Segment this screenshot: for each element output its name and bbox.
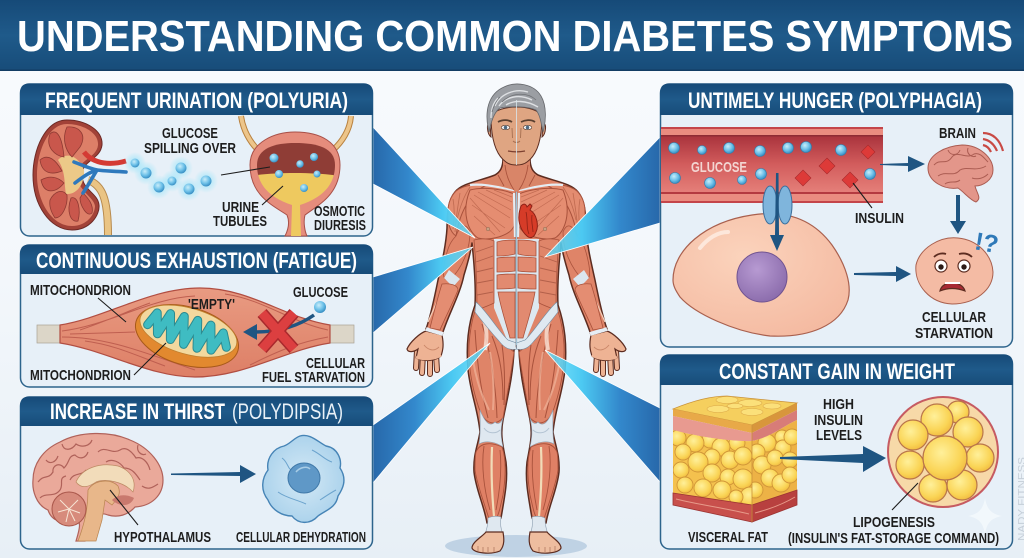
labels: CELLULAR DEHYDRATION (236, 529, 366, 546)
biceps (443, 226, 470, 280)
labels: 'EMPTY' (188, 296, 235, 313)
icon: sparkle (968, 498, 1002, 534)
beam: polyphagia (545, 137, 660, 257)
arrow (854, 266, 911, 282)
header banner (0, 0, 1024, 71)
leader line (221, 167, 283, 205)
leader line (98, 298, 166, 375)
heading: CONSTANT GAIN IN WEIGHT (719, 359, 955, 384)
obliques (474, 239, 494, 310)
icon: signal waves (983, 133, 1003, 152)
labels: MITOCHONDRION (30, 282, 131, 299)
heading: INCREASE IN THIRST (50, 399, 225, 424)
icon: cell with nucleus (673, 214, 849, 336)
labels: VISCERAL FAT (688, 529, 768, 546)
beam: polydipsia (373, 343, 490, 483)
labels: MITOCHONDRION (30, 367, 131, 384)
labels (855, 125, 993, 342)
foot (472, 532, 504, 553)
arrow (780, 446, 886, 472)
labels: OSMOTIC (314, 203, 365, 220)
hand (407, 331, 443, 374)
deltoid (448, 185, 485, 236)
floor shadow (445, 535, 587, 557)
labels: FUEL STARVATION (262, 369, 365, 386)
pectoral (466, 188, 514, 239)
heading: CONTINUOUS EXHAUSTION (FATIGUE) (36, 248, 357, 273)
heading: FREQUENT URINATION (POLYURIA) (45, 88, 348, 113)
icon: kidney (33, 120, 126, 235)
icon: mitochondrion (128, 294, 246, 378)
facial features (498, 100, 535, 165)
knee (479, 410, 503, 447)
leader line (110, 490, 138, 525)
labels (30, 282, 365, 386)
icon: channel and arrow (763, 173, 792, 251)
blood vessel (661, 127, 883, 203)
arrow (950, 195, 966, 234)
labels: HIGH (823, 396, 854, 413)
labels: GLUCOSE (293, 284, 348, 301)
forearm (430, 284, 458, 330)
heading: (POLYDIPSIA) (232, 399, 343, 424)
labels: STARVATION (915, 325, 993, 342)
icon: dehydrated cell (263, 435, 344, 522)
icon: bladder (241, 116, 351, 236)
icon: adipocyte cluster (888, 397, 998, 507)
face (491, 107, 542, 165)
labels: CELLULAR (922, 309, 986, 326)
labels: BRAIN (939, 125, 976, 142)
labels: LIPOGENESIS (853, 514, 935, 531)
icon: starving cell face (916, 238, 993, 304)
beam: weight gain (545, 350, 660, 482)
labels: LEVELS (816, 427, 862, 444)
linea alba (516, 158, 518, 345)
labels: INSULIN (855, 210, 904, 227)
panel: continuous exhaustion (20, 244, 373, 387)
panel: increase in thirst (20, 396, 373, 549)
arrow (171, 465, 256, 483)
icon: brain (928, 145, 993, 202)
blood vessel: GLUCOSE (691, 159, 747, 176)
labels (688, 396, 999, 547)
labels (144, 125, 366, 234)
arrow (880, 156, 925, 172)
labels: DIURESIS (314, 217, 366, 234)
labels: INSULIN (814, 412, 863, 429)
neck (484, 150, 549, 192)
beam: polyuria (373, 127, 475, 238)
labels: URINE (222, 199, 259, 216)
panel: constant gain in weight (660, 354, 1013, 549)
heart (519, 204, 537, 238)
icon: muscle fibre (37, 288, 354, 377)
glucose molecules (668, 142, 876, 188)
beam: fatigue (373, 247, 473, 333)
leader line (892, 483, 918, 510)
hair (487, 84, 545, 132)
icon: spilled glucose drops (124, 152, 218, 201)
abs fascia (494, 239, 516, 345)
panel: frequent urination (20, 84, 373, 236)
thigh (469, 311, 514, 423)
clavicle and central fascia (470, 185, 515, 237)
abs (497, 240, 515, 338)
labels: CELLULAR (306, 355, 365, 372)
icon: blocked glucose arrow (243, 301, 326, 349)
elbow fascia (444, 270, 460, 287)
icon: exclamation mark and question mark: !? (973, 227, 1001, 259)
labels: SPILLING OVER (144, 140, 236, 157)
pelvic fascia (475, 302, 516, 349)
labels: TUBULES (213, 213, 267, 230)
leader line (853, 183, 872, 208)
ankle (485, 516, 503, 534)
labels: GLUCOSE (162, 125, 218, 142)
calf (475, 444, 505, 519)
icon: fat tissue cube (670, 396, 800, 522)
panel: untimely hunger (660, 84, 1013, 347)
labels: HYPOTHALAMUS (114, 529, 211, 546)
icon: brain with hypothalamus (33, 433, 163, 541)
ears (487, 124, 546, 137)
labels (114, 529, 366, 546)
human anatomy figure (407, 84, 626, 553)
insulin diamonds (795, 145, 875, 188)
